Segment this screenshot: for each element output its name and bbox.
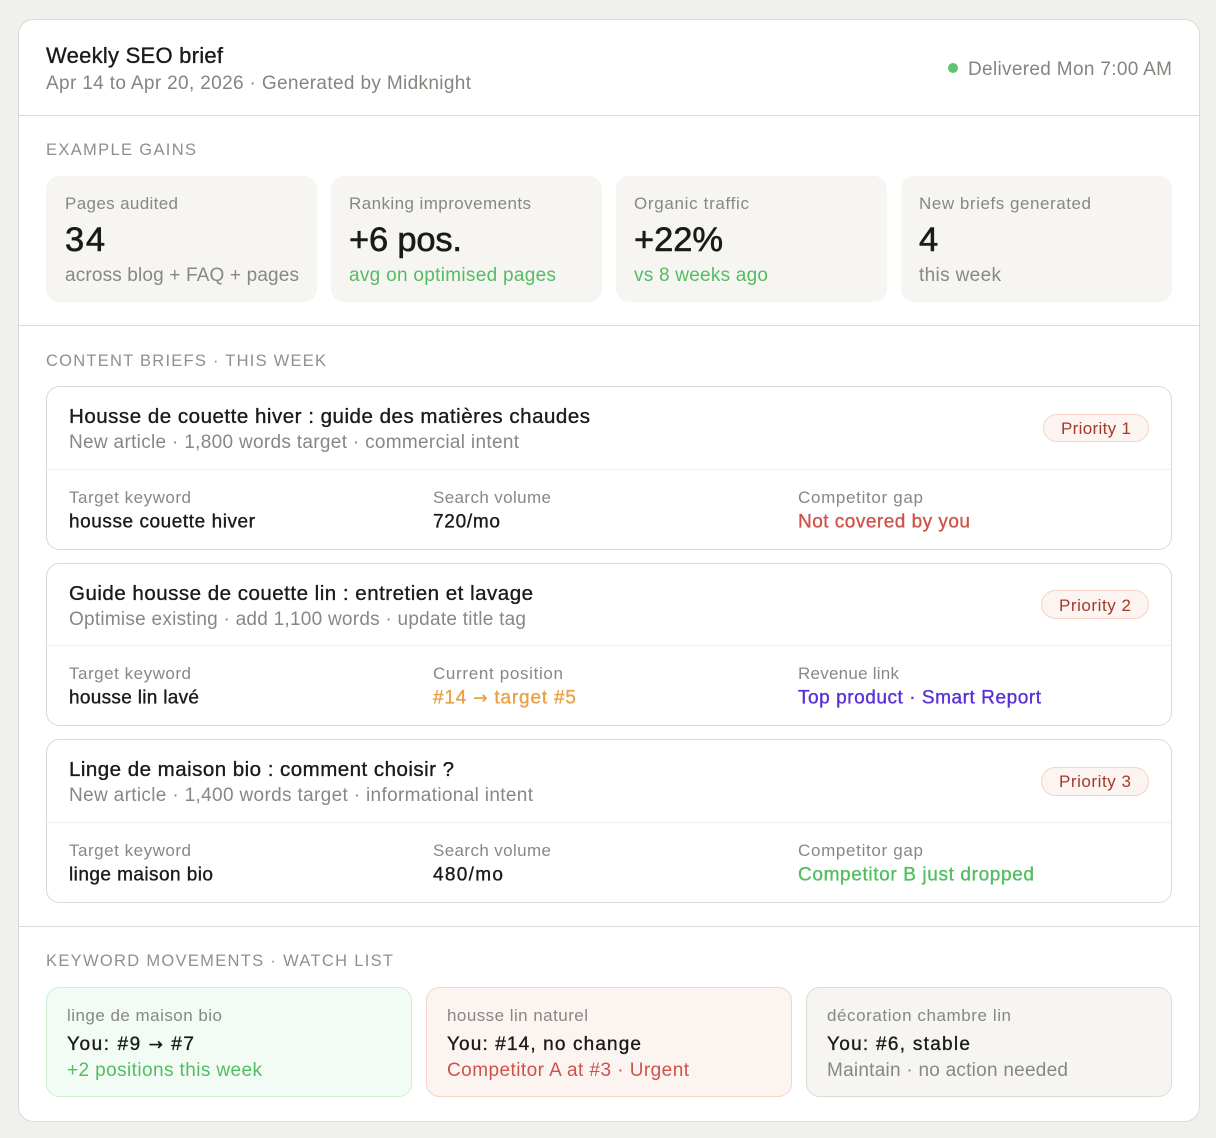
keyword card: linge de maison bio: You: #9 → #7: [67, 1034, 194, 1055]
title: Weekly SEO brief: [46, 43, 224, 68]
brief card: priority 3: Linge de maison bio : comment choisir ?: [69, 758, 454, 781]
section heading: keyword movements: KEYWORD MOVEMENTS · WATCH LIST: [46, 952, 393, 970]
delivery status: Delivered Mon 7:00 AM: [968, 59, 1172, 80]
keyword card: décoration chambre lin: décoration chambre lin: [827, 1006, 1011, 1025]
brief card: priority 3: New article · 1,400 words target · informational intent: [69, 785, 534, 806]
stat card: organic traffic: Organic traffic: [634, 194, 750, 213]
brief card: priority 2: Target keyword: [69, 664, 191, 683]
priority badge: Priority 3: [1059, 772, 1131, 791]
stat card: new briefs generated: this week: [919, 265, 1002, 286]
priority badge: [1044, 414, 1148, 442]
brief card: priority 2: Top product · Smart Report: [798, 688, 1042, 708]
keyword card: décoration chambre lin: You: #6, stable: [827, 1034, 970, 1055]
priority badge: Priority 2: [1059, 596, 1131, 615]
brief card: priority 1: Not covered by you: [798, 512, 970, 532]
keyword card: décoration chambre lin: [806, 988, 1172, 1096]
brief card: priority 1: 720/mo: [433, 512, 500, 532]
stat card: pages audited: [46, 176, 317, 302]
stat card: ranking improvements: [331, 176, 602, 302]
brief card: priority 1: housse couette hiver: [69, 512, 256, 532]
stat card: new briefs generated: [901, 176, 1172, 302]
stat card: pages audited: across blog + FAQ + pages: [65, 265, 299, 286]
brief card: priority 2: Current position: [433, 664, 563, 683]
stat card: pages audited: Pages audited: [65, 194, 178, 213]
priority badge: [1042, 590, 1148, 618]
stat card: new briefs generated: New briefs generated: [919, 194, 1091, 213]
brief card: priority 2: housse lin lavé: [69, 688, 199, 708]
brief card: priority 3: Target keyword: [69, 841, 191, 860]
subtitle: Apr 14 to Apr 20, 2026 · Generated by Midknight: [46, 73, 472, 94]
brief card: priority 3: Search volume: [433, 841, 551, 860]
brief card: priority 2: Optimise existing · add 1,100 words · update title tag: [69, 609, 526, 630]
stat card: organic traffic: vs 8 weeks ago: [634, 265, 768, 286]
keyword card: décoration chambre lin: Maintain · no action needed: [827, 1060, 1068, 1081]
brief card: priority 3: Competitor B just dropped: [798, 864, 1034, 886]
stat card: ranking improvements: +6 pos.: [349, 221, 462, 259]
brief card: priority 3: linge maison bio: [69, 864, 213, 886]
brief card: priority 1: [46, 386, 1172, 550]
brief card: priority 2: [46, 564, 1172, 726]
brief card: priority 3: 480/mo: [433, 864, 503, 886]
stat card: ranking improvements: avg on optimised pages: [349, 265, 556, 286]
brief card: priority 1: Competitor gap: [798, 488, 923, 507]
keyword card: housse lin naturel: Competitor A at #3 · Urgent: [447, 1060, 690, 1081]
brief card: priority 1: Housse de couette hiver : guide des matières chaudes: [69, 405, 590, 428]
brief card: priority 3: Competitor gap: [798, 841, 923, 860]
brief card: priority 3: [46, 740, 1172, 902]
brief card: priority 1: New article · 1,800 words target · commercial intent: [69, 432, 520, 453]
keyword card: housse lin naturel: housse lin naturel: [447, 1006, 588, 1025]
stat card: ranking improvements: Ranking improvements: [349, 194, 531, 213]
brief card: priority 2: Guide housse de couette lin : entretien et lavage: [69, 582, 533, 605]
stat card: organic traffic: [616, 176, 887, 302]
stat card: pages audited: 34: [65, 221, 105, 259]
keyword card: linge de maison bio: linge de maison bio: [67, 1006, 222, 1025]
brief card: priority 2: Revenue link: [798, 664, 900, 683]
priority badge: Priority 1: [1061, 419, 1131, 438]
section heading: example gains: EXAMPLE GAINS: [46, 141, 196, 159]
brief card: priority 1: Search volume: [433, 488, 551, 507]
keyword card: housse lin naturel: You: #14, no change: [447, 1034, 641, 1055]
keyword card: housse lin naturel: [426, 988, 792, 1096]
header: [46, 43, 1172, 94]
section heading: content briefs: CONTENT BRIEFS · THIS WEEK: [46, 352, 326, 370]
stat card: organic traffic: +22%: [634, 221, 723, 259]
brief card: priority 2: #14 → target #5: [433, 688, 576, 708]
keyword card: linge de maison bio: +2 positions this week: [67, 1060, 262, 1081]
stat card: new briefs generated: 4: [919, 221, 938, 259]
keyword card: linge de maison bio: [46, 988, 412, 1096]
brief card: priority 1: Target keyword: [69, 488, 191, 507]
priority badge: [1042, 768, 1148, 796]
